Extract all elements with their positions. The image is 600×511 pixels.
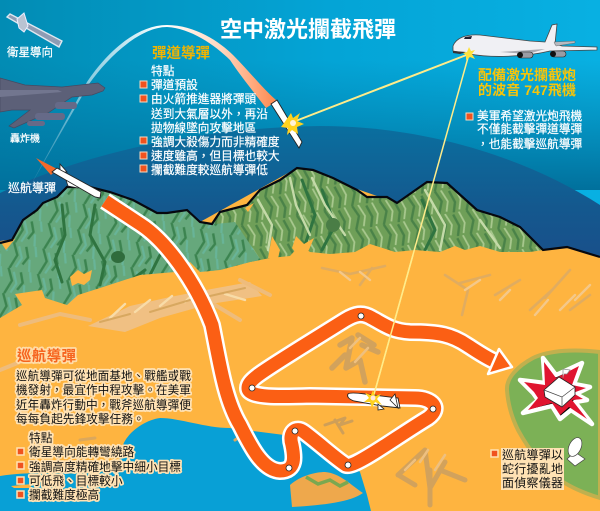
sea — [0, 418, 371, 511]
ballistic features list: 特點 — [151, 64, 175, 78]
laser over path — [373, 255, 413, 398]
ballistic features list: 攔截難度較巡航導彈低 — [151, 163, 268, 177]
target green area — [507, 350, 600, 498]
note: jamming ground sensors: 蛇行擾亂地 — [502, 461, 563, 476]
second dark pocket — [326, 218, 340, 232]
note: laser plane: ，也能截擊巡航導彈 — [477, 137, 583, 151]
icon: ballistic missile with explosion — [271, 100, 304, 148]
sand inlets in mountains — [0, 203, 314, 286]
note: jamming ground sensors: 面偵察儀器 — [502, 476, 563, 490]
ballistic features list: 由火箭推進器將彈頭 — [151, 92, 257, 106]
desert relief markings — [0, 266, 590, 505]
cruise missile paragraph — [16, 369, 191, 426]
note: laser plane: 不僅能截擊彈道導彈 — [477, 122, 583, 136]
ballistic arc — [28, 25, 277, 190]
ballistic features list: 彈道預設 — [151, 78, 198, 92]
icon: cruise missile launch — [36, 158, 101, 198]
sky darkening band — [0, 60, 600, 190]
ballistic features list — [140, 64, 280, 177]
cruise missile features — [17, 431, 181, 502]
label: satellite guidance: 衛星導向 — [7, 45, 53, 59]
heading: laser 747: 的波音 747飛機 — [478, 82, 576, 98]
cruise missile features: 可低飛、目標較小 — [29, 474, 123, 488]
ground: desert — [0, 168, 600, 511]
island — [290, 472, 363, 507]
note: laser plane: 美軍希望激光炮飛機 — [477, 109, 583, 123]
cruise missile paragraph: 近年轟炸行動中，戰斧巡航導彈便 — [16, 398, 191, 412]
heading: laser 747: 配備激光攔截炮 — [478, 67, 576, 83]
sky background — [0, 0, 600, 280]
label: bomber: 轟炸機 — [10, 132, 40, 145]
icon: radar dish — [565, 435, 585, 466]
intercepted cruise missile with explosion — [348, 390, 400, 410]
mountains — [0, 169, 542, 318]
desert relief band — [88, 282, 262, 332]
cruise missile paragraph: 機發射，最宜作中程攻擊。在美軍 — [16, 383, 191, 397]
ballistic features list: 拋物線墜向攻擊地區 — [151, 121, 257, 135]
icon: boeing 747 laser plane — [453, 24, 597, 60]
cruise missile features: 特點 — [29, 431, 53, 445]
heading: laser 747 — [478, 67, 576, 98]
icon: satellite — [7, 13, 62, 47]
dark mountain pockets — [111, 251, 125, 263]
small sand spit — [11, 484, 32, 488]
dark horizon dome — [0, 126, 600, 290]
label: cruise missile: 巡航導彈 — [8, 181, 56, 195]
ballistic features list: 強調大殺傷力而非精確度 — [151, 135, 280, 149]
cruise missile paragraph: 巡航導彈可從地面基地、戰艦或戰 — [16, 369, 191, 383]
ballistic features list: 速度雖高，但目標也較大 — [151, 149, 280, 163]
cruise missile features: 強調高度精確地擊中細小目標 — [29, 460, 181, 474]
heading: cruise missile: 巡航導彈 — [17, 347, 76, 365]
cruise missile flight path — [105, 201, 494, 471]
path waypoints — [249, 313, 436, 471]
ballistic features list: 送到大氣層以外，再沿 — [151, 107, 268, 121]
mountain ridge outline — [0, 168, 600, 257]
cruise missile features: 攔截難度極高 — [29, 488, 99, 502]
note: laser plane — [466, 109, 583, 151]
note: jamming ground sensors: 巡航導彈以 — [502, 448, 563, 462]
icon: bomber — [0, 78, 105, 128]
arrowhead — [488, 349, 512, 374]
note: jamming ground sensors — [491, 448, 564, 490]
cruise missile features: 衛星導向能轉彎繞路 — [29, 445, 135, 459]
cruise missile paragraph: 每每負起先鋒攻擊任務。 — [16, 412, 145, 426]
heading: ballistic missile: 彈道導彈 — [152, 44, 210, 62]
title: 空中激光攔截飛彈 — [220, 17, 396, 42]
laser beams — [293, 54, 469, 398]
icon: target building explosion — [520, 358, 592, 424]
